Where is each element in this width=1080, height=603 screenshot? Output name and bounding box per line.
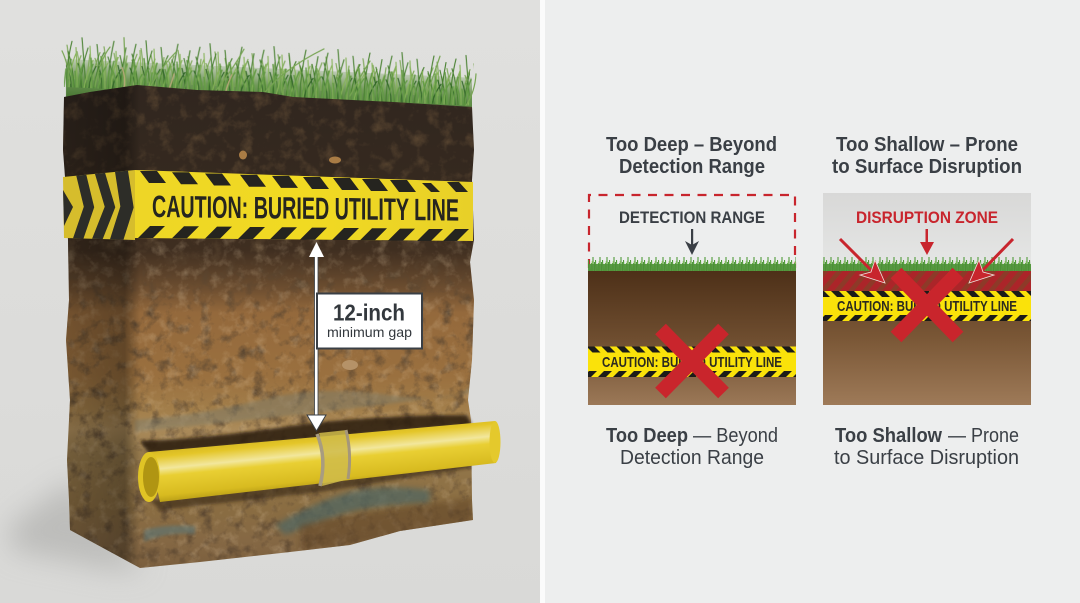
yellow pipe <box>138 421 500 502</box>
pipe body <box>149 421 498 502</box>
callout: 12-inch minimum gap <box>317 294 422 348</box>
dashed detection range box <box>589 195 795 268</box>
pipe opening rim <box>138 452 160 502</box>
caption: too shallow: Too Shallow <box>835 425 942 447</box>
red x mark <box>896 273 958 337</box>
tape bottom hazard stripes <box>138 226 469 241</box>
stones <box>239 150 358 370</box>
disruption zone label: DISRUPTION ZONE <box>856 209 998 227</box>
pipe right end <box>490 421 500 463</box>
caption: too shallow: — Prone <box>948 425 1019 447</box>
ground shadow <box>10 480 145 570</box>
tape side chevrons <box>63 168 135 245</box>
soil layers <box>55 80 480 575</box>
soil <box>588 271 796 405</box>
light speckle <box>55 238 480 575</box>
pipe opening <box>143 457 159 497</box>
grey sediment streak <box>135 385 470 432</box>
grass strip <box>823 255 1031 271</box>
caution tape <box>823 291 1031 321</box>
panel: too shallow diagram <box>823 193 1031 405</box>
tape top hazard stripes <box>140 171 468 192</box>
callout: 12-inch minimum gap: minimum gap <box>327 324 412 340</box>
caption: too deep <box>606 425 778 469</box>
tape label: CAUTION: BURIED UTILITY LINE <box>152 189 459 228</box>
left red arrow <box>840 239 885 283</box>
caption: too deep: Too Deep <box>606 425 688 447</box>
caption: too shallow <box>834 425 1019 469</box>
tape front <box>135 170 473 241</box>
grass strip <box>588 255 796 271</box>
blue-green mineral band <box>275 487 430 535</box>
heading: too deep <box>606 134 777 178</box>
soil speckle <box>55 80 480 575</box>
soil cross-section illustration <box>55 31 500 575</box>
caption: too deep: — Beyond <box>693 425 778 447</box>
caption: too deep: Detection Range <box>620 447 764 469</box>
heading: too shallow: Too Shallow – Prone <box>836 134 1018 156</box>
lower dark crust <box>300 498 472 552</box>
heading: too deep: Too Deep – Beyond <box>606 134 777 156</box>
red down arrow <box>920 229 934 255</box>
caution tape on soil <box>63 168 473 245</box>
caption: too shallow: to Surface Disruption <box>834 447 1019 469</box>
right background <box>544 0 1080 603</box>
grass <box>62 31 476 122</box>
caution tape: CAUTION: BURIED UTILITY LINE <box>837 298 1017 315</box>
detection range label: DETECTION RANGE <box>619 209 765 227</box>
soil block <box>55 80 480 575</box>
mineral band lower left <box>144 526 195 542</box>
pipe cavity shadow <box>140 415 472 454</box>
callout: 12-inch minimum gap: 12-inch <box>333 300 405 326</box>
panel: too deep diagram <box>588 195 796 405</box>
detection arrow <box>685 229 699 255</box>
panel divider <box>540 0 545 603</box>
heading: too deep: Detection Range <box>619 156 765 178</box>
double-headed gap arrow <box>307 242 326 431</box>
red disruption band <box>823 271 1031 292</box>
caution tape <box>588 346 796 377</box>
soil <box>823 271 1031 405</box>
left background <box>0 0 541 603</box>
heading: too shallow: to Surface Disruption <box>832 156 1022 178</box>
sky <box>823 193 1031 271</box>
pipe underside shadow <box>150 460 470 510</box>
heading: too shallow <box>832 134 1022 178</box>
pipe coupling <box>317 430 350 486</box>
left face shade <box>60 80 140 575</box>
right red arrow <box>969 239 1013 283</box>
red x mark <box>660 329 724 393</box>
caution tape: CAUTION: BURIED UTILITY LINE <box>602 354 782 371</box>
